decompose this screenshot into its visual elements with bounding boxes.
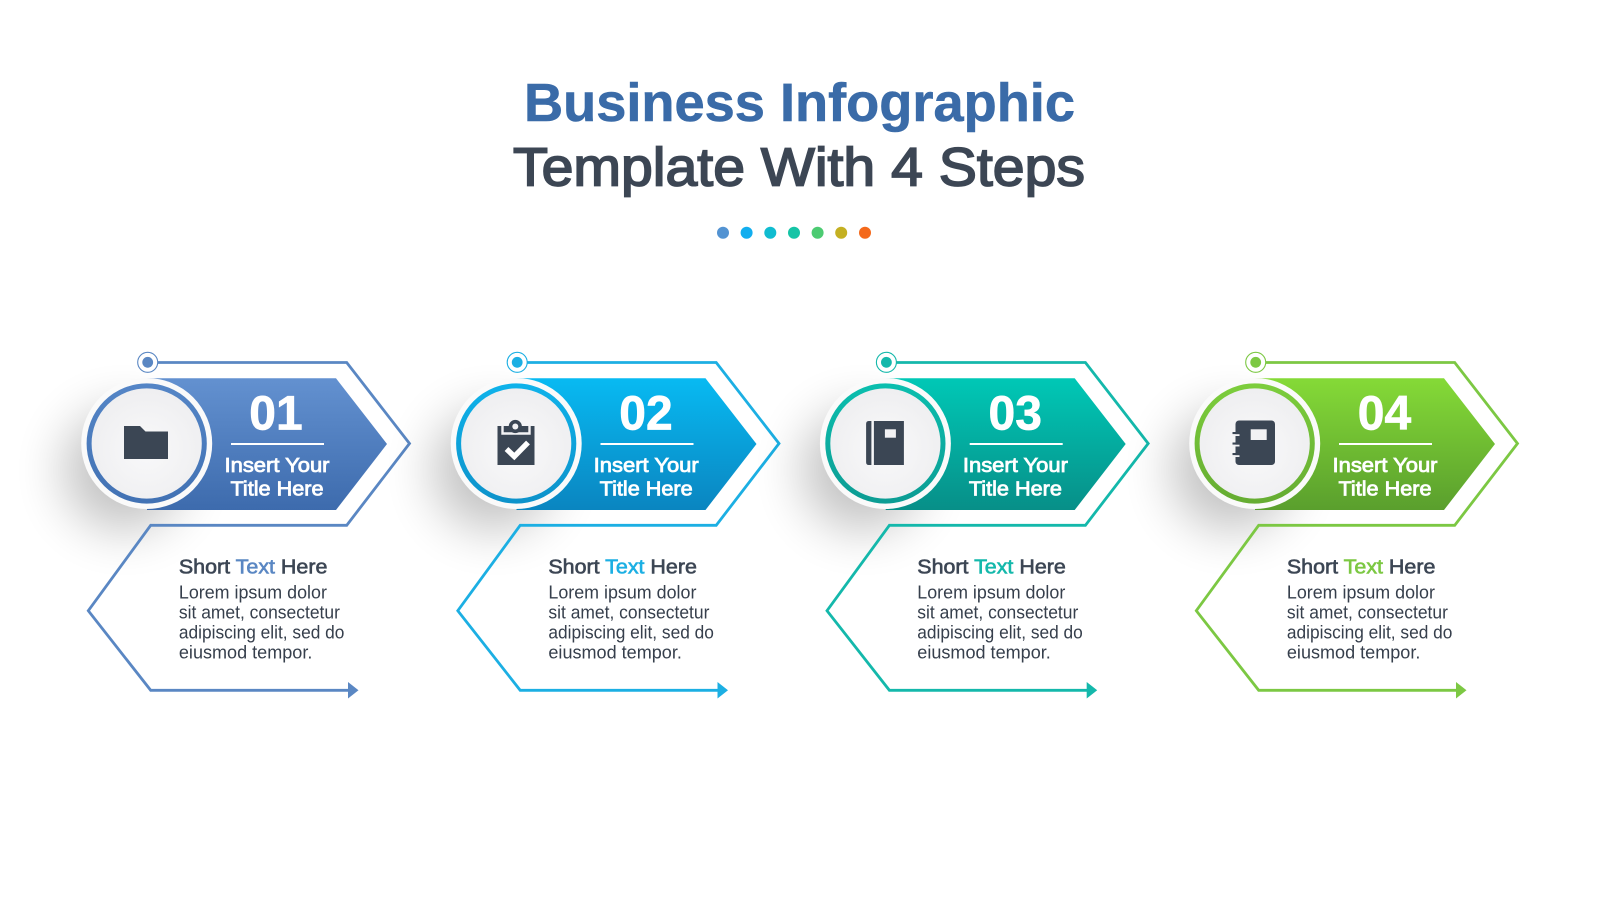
drop shadow	[803, 410, 923, 530]
description	[548, 556, 714, 662]
arrow head	[1087, 682, 1097, 698]
description: sit amet, consectetur	[1287, 602, 1448, 622]
description: sit amet, consectetur	[548, 602, 709, 622]
banner divider	[600, 443, 694, 445]
banner title: Insert Your	[594, 454, 699, 477]
description: sit amet, consectetur	[179, 602, 340, 622]
badge circle	[81, 378, 212, 509]
drop shadow	[1172, 410, 1292, 530]
description: Short Text Here	[548, 556, 697, 578]
banner title	[224, 454, 330, 500]
arrow banner	[147, 378, 387, 510]
step number: 04	[1358, 388, 1412, 440]
description: Lorem ipsum dolor	[548, 582, 696, 602]
banner title	[963, 454, 1068, 500]
arrow head	[348, 682, 358, 698]
arrow banner	[1255, 378, 1495, 510]
title line 1: Business Infographic	[524, 73, 1075, 133]
description: eiusmod tempor.	[179, 642, 312, 662]
badge circle	[820, 378, 951, 509]
icon: clipboard with check	[498, 420, 534, 465]
start dot	[512, 357, 523, 368]
description: Lorem ipsum dolor	[917, 582, 1065, 602]
arrow banner	[886, 378, 1126, 510]
drop shadow	[434, 410, 554, 530]
title line 2: Template With 4 Steps	[513, 138, 1085, 198]
banner divider	[970, 443, 1063, 445]
banner title: Title Here	[969, 478, 1062, 500]
description: eiusmod tempor.	[917, 642, 1051, 662]
start dot	[881, 357, 892, 368]
banner title: Title Here	[230, 478, 324, 500]
title	[513, 73, 1085, 198]
outline path with start marker	[827, 352, 1148, 690]
panel: step 01	[64, 352, 410, 698]
icon: spiral notebook	[1232, 420, 1275, 465]
start dot	[142, 357, 153, 368]
description	[179, 556, 344, 662]
description: adipiscing elit, sed do	[548, 622, 714, 642]
description: Short Text Here	[1287, 556, 1435, 578]
panel: step 03	[803, 352, 1148, 698]
drop shadow	[64, 410, 184, 530]
banner divider	[1339, 443, 1432, 445]
description: sit amet, consectetur	[917, 602, 1078, 622]
arrow banner	[516, 378, 756, 510]
panel: step 02	[434, 352, 779, 698]
banner title: Title Here	[600, 478, 693, 500]
arrow head	[1456, 682, 1466, 698]
banner title: Insert Your	[963, 454, 1068, 477]
outline path with start marker	[1196, 352, 1518, 690]
description: adipiscing elit, sed do	[1287, 622, 1452, 642]
banner title: Title Here	[1338, 478, 1432, 500]
description: eiusmod tempor.	[1287, 642, 1420, 662]
step number: 02	[619, 388, 673, 440]
outline path with start marker	[458, 352, 779, 690]
badge circle	[451, 378, 582, 509]
icon: folder	[124, 426, 168, 459]
step number: 03	[989, 388, 1042, 440]
description: adipiscing elit, sed do	[179, 622, 344, 642]
description: Lorem ipsum dolor	[179, 582, 327, 602]
description: adipiscing elit, sed do	[917, 622, 1083, 642]
description: Short Text Here	[179, 556, 327, 578]
banner divider	[231, 443, 324, 445]
description	[1287, 556, 1452, 662]
arrow head	[718, 682, 728, 698]
icon: book	[866, 421, 904, 465]
banner title	[594, 454, 699, 500]
decorative dots row	[717, 227, 871, 239]
description	[917, 556, 1083, 662]
start dot	[1250, 357, 1261, 368]
description: Short Text Here	[917, 556, 1066, 578]
description: Lorem ipsum dolor	[1287, 582, 1435, 602]
panel: step 04	[1172, 352, 1518, 698]
description: eiusmod tempor.	[548, 642, 682, 662]
badge circle	[1189, 378, 1320, 509]
step number: 01	[249, 388, 303, 440]
banner title: Insert Your	[1332, 454, 1438, 477]
banner title	[1332, 454, 1438, 500]
banner title: Insert Your	[224, 454, 330, 477]
outline path with start marker	[88, 352, 410, 690]
